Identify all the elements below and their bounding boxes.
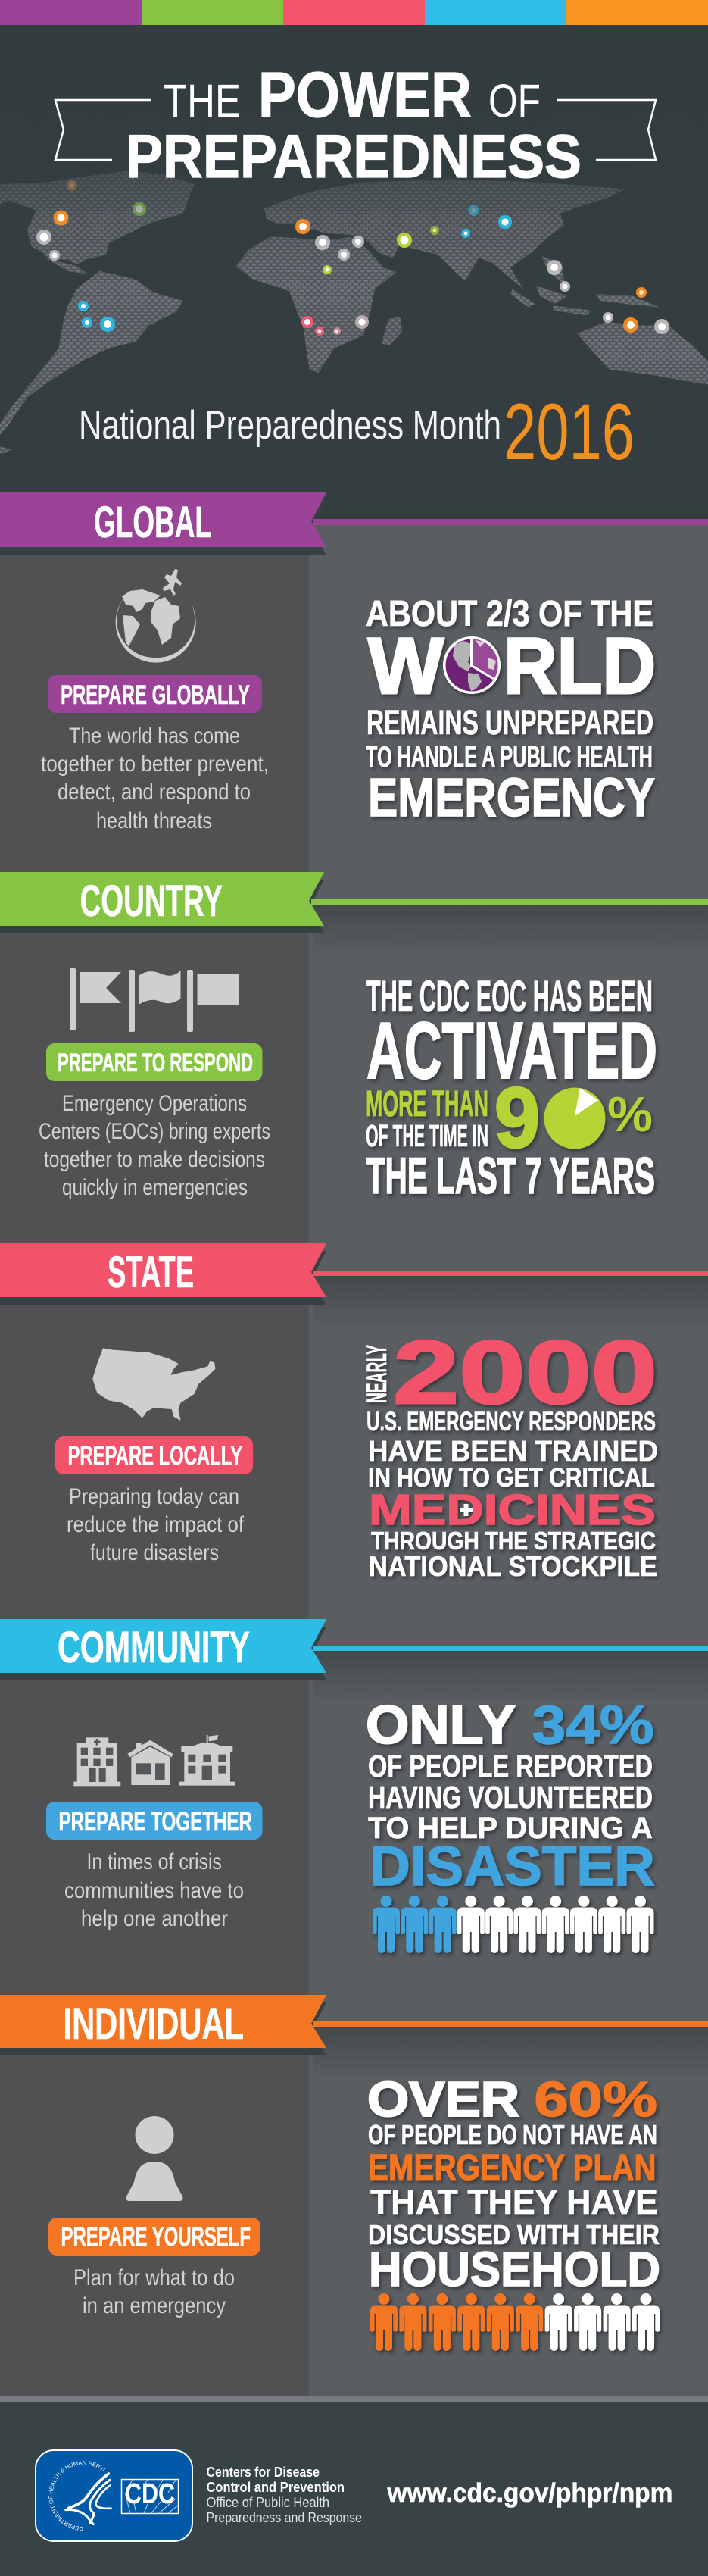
statistic: over 60 percent no plan: 60%: [535, 2071, 657, 2127]
label pill: prepare to respond: PREPARE TO RESPOND: [58, 1049, 253, 1077]
individual banner: [0, 1995, 708, 2055]
map location pins: [36, 180, 669, 336]
description: community: In times of crisis: [86, 1849, 222, 1874]
statistic: only 34 percent volunteered: [366, 1696, 655, 1953]
dotted world map: [0, 171, 708, 454]
global banner: [0, 492, 708, 555]
title: POWER: [258, 59, 472, 130]
organisation text: Office of Public Health: [206, 2495, 329, 2510]
statistic: over 60 percent no plan: EMERGENCY PLAN: [368, 2148, 656, 2188]
organisation text: [206, 2465, 362, 2525]
description: state: Preparing today can: [69, 1484, 239, 1509]
statistic: nearly 2000 responders: IN HOW TO GET CRITICAL: [368, 1463, 655, 1493]
description: country: together to make decisions: [44, 1147, 265, 1172]
community banner: COMMUNITY: [58, 1623, 250, 1672]
state banner: STATE: [108, 1248, 194, 1297]
label pill: prepare locally: [55, 1436, 253, 1474]
description: state: future disasters: [90, 1540, 219, 1565]
icon: globe clock: [443, 636, 501, 694]
title: OF: [488, 75, 541, 127]
label pill: prepare globally: PREPARE GLOBALLY: [61, 680, 250, 710]
statistic: two thirds of the world: ABOUT 2/3 OF THE: [366, 594, 653, 634]
description: global: detect, and respond to: [58, 780, 251, 805]
title: [126, 59, 582, 191]
label pill: prepare yourself: [48, 2218, 260, 2256]
label pill: prepare to respond: [46, 1043, 262, 1081]
icon: three flags: [70, 968, 239, 1032]
label pill: prepare locally: PREPARE LOCALLY: [68, 1441, 242, 1471]
subtitle: National Preparedness Month: [79, 403, 501, 448]
statistic: nearly 2000 responders: NEARLY: [361, 1345, 392, 1403]
organisation text: Control and Prevention: [206, 2480, 345, 2495]
title ribbon outline: [55, 100, 656, 160]
description: global: The world has come: [69, 724, 240, 749]
statistic: nearly 2000 responders: THROUGH THE STRATEGIC: [371, 1527, 656, 1555]
icon: hhs eagle: [66, 2474, 111, 2524]
description: state: [67, 1484, 245, 1565]
section: global: [0, 492, 708, 833]
cdc mark: CDC: [125, 2478, 175, 2510]
description: country: quickly in emergencies: [62, 1175, 248, 1200]
statistic: nearly 2000 responders: [361, 1323, 658, 1582]
chart: ten people, three highlighted: [373, 1896, 654, 1953]
description: global: together to better prevent,: [41, 752, 269, 777]
statistic: only 34 percent volunteered: ONLY: [366, 1696, 516, 1755]
statistic: two thirds of the world: W: [368, 622, 444, 711]
statistic: two thirds of the world: EMERGENCY: [368, 768, 655, 828]
statistic: over 60 percent no plan: HOUSEHOLD: [369, 2242, 660, 2296]
statistic: two thirds of the world: [366, 594, 656, 828]
country banner: COUNTRY: [80, 877, 223, 926]
description: community: communities have to: [64, 1878, 244, 1903]
description: community: [64, 1849, 244, 1931]
statistic: nearly 2000 responders: 2000: [393, 1323, 657, 1423]
statistic: only 34 percent volunteered: 34%: [532, 1696, 654, 1755]
logo: hhs and cdc: [35, 2449, 193, 2542]
description: country: Centers (EOCs) bring experts: [39, 1119, 270, 1144]
statistic: nearly 2000 responders: HAVE BEEN TRAINED: [368, 1436, 658, 1468]
title: THE: [164, 75, 241, 127]
country banner: [0, 872, 708, 933]
label pill: prepare yourself: PREPARE YOURSELF: [61, 2222, 251, 2252]
individual banner: INDIVIDUAL: [64, 1999, 244, 2049]
statistic: nearly 2000 responders: MEDICINES: [369, 1486, 656, 1534]
top colour bar: [0, 0, 708, 25]
seal text: DEPARTMENT OF HEALTH & HUMAN SERVICES·USA: [48, 2461, 106, 2531]
description: global: [41, 724, 269, 833]
statistic: over 60 percent no plan: DISCUSSED WITH THEIR: [368, 2219, 660, 2250]
statistic: eoc activated: MORE THAN: [366, 1084, 488, 1124]
icon: medical cross: [460, 1504, 473, 1516]
description: individual: Plan for what to do: [73, 2265, 235, 2290]
statistic: eoc activated: %: [607, 1086, 653, 1142]
statistic: only 34 percent volunteered: DISASTER: [370, 1836, 655, 1897]
statistic: eoc activated: [366, 972, 657, 1205]
description: individual: in an emergency: [83, 2293, 226, 2318]
section: community: [0, 1619, 708, 1953]
website url: www.cdc.gov/phpr/npm: [387, 2478, 672, 2508]
statistic: two thirds of the world: RLD: [504, 622, 656, 711]
section: individual: [0, 1995, 708, 2351]
statistic: only 34 percent volunteered: TO HELP DURING A: [368, 1812, 653, 1845]
label pill: prepare together: PREPARE TOGETHER: [59, 1807, 252, 1837]
description: country: Emergency Operations: [62, 1091, 247, 1116]
label pill: prepare globally: [48, 675, 262, 713]
statistic: over 60 percent no plan: THAT THEY HAVE: [370, 2183, 658, 2221]
state banner: [0, 1243, 708, 1305]
year: 2016: [504, 388, 635, 477]
section: state: [0, 1243, 708, 1582]
community banner: [0, 1619, 708, 1680]
chart: ninety percent pie: [544, 1088, 606, 1149]
title: PREPAREDNESS: [126, 123, 582, 191]
description: global: health threats: [96, 808, 212, 833]
organisation text: Centers for Disease: [206, 2465, 320, 2480]
icon: person: [126, 2116, 183, 2201]
description: country: [39, 1091, 270, 1200]
icon: map of the united states: [92, 1348, 215, 1421]
organisation text: Preparedness and Response: [206, 2510, 362, 2525]
icon: globe with plane: [116, 569, 196, 663]
section: country: [0, 872, 708, 1205]
description: state: reduce the impact of: [67, 1512, 245, 1537]
chart: ten people, six highlighted: [370, 2293, 660, 2351]
icon: hospital, house and school: [73, 1735, 235, 1786]
statistic: eoc activated: 9: [494, 1071, 540, 1165]
description: individual: [73, 2265, 235, 2318]
panels background: [0, 525, 708, 2402]
global banner: GLOBAL: [94, 498, 212, 547]
label pill: prepare together: [46, 1802, 262, 1840]
statistic: nearly 2000 responders: NATIONAL STOCKPILE: [369, 1551, 657, 1582]
statistic: eoc activated: OF THE TIME IN: [366, 1118, 488, 1153]
statistic: over 60 percent no plan: OVER: [367, 2071, 519, 2127]
description: community: help one another: [81, 1906, 228, 1931]
statistic: over 60 percent no plan: [367, 2071, 660, 2351]
